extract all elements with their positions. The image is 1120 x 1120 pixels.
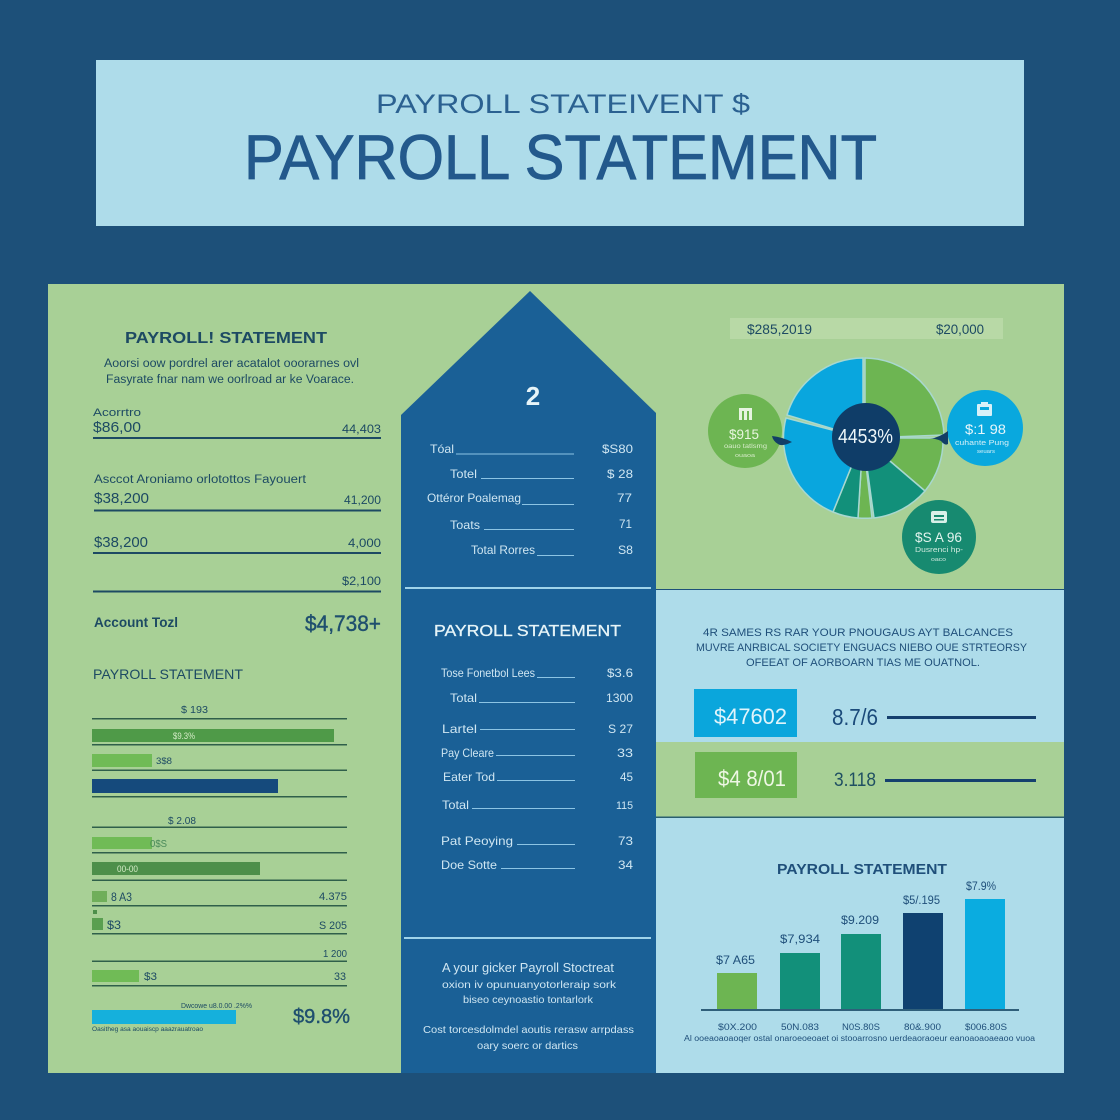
left intro text: Fasyrate fnar nam we oorlroad ar ke Voarace. (106, 374, 354, 386)
callout: green bubble: oauo tatlsmg (724, 444, 767, 450)
row: tax (441, 666, 633, 680)
bar chart heading: PAYROLL STATEMENT (777, 861, 947, 878)
metric row: blue (694, 689, 1036, 737)
panel: top right green (656, 284, 1064, 589)
pie centre value: 4453% (838, 426, 893, 448)
callout: teal bubble: oaco (931, 557, 946, 563)
left intro text (104, 358, 359, 386)
row: total hours (471, 543, 633, 557)
right intro text: 4R SAMES RS RAR YOUR PNOUGAUS AYT BALCANCES (703, 627, 1013, 639)
icon: card (931, 511, 947, 523)
progress bar with total: $9.8% (293, 1006, 350, 1028)
icon: people (739, 408, 752, 420)
account total (94, 611, 381, 636)
account row 1 (93, 407, 381, 439)
account row 2: Asccot Aroniamo orlotottos Fayouert (94, 474, 307, 486)
right intro text: OFEEAT OF AORBOARN TIAS ME OUATNOL. (746, 657, 980, 669)
bar list: second group: 00-00 (117, 864, 138, 874)
row: total 3: 1300 (606, 691, 633, 705)
account row 4: $2,100 (342, 574, 381, 588)
callout: blue bubble (930, 390, 1023, 466)
account total: $4,738+ (305, 611, 381, 636)
centre footer text: oary soerc or dartics (477, 1040, 578, 1052)
left subheading: PAYROLL STATEMENT (93, 666, 243, 682)
row: tools: Toats (450, 518, 480, 532)
bar chart: $9.209 (841, 913, 879, 927)
panel: account summary and bars (48, 284, 401, 1073)
pie chart (783, 358, 944, 518)
centre footer text: Cost torcesdolmdel aoutis rerasw arrpdass (423, 1024, 634, 1036)
row: due: Doe Sotte (441, 858, 497, 872)
panel: middle right blue (656, 590, 1064, 742)
progress bar with total: Dwcowe u8.0.00 .2%% (181, 1003, 252, 1010)
account row 3: 4,000 (348, 536, 381, 550)
panel: middle right green band (656, 742, 1064, 817)
bar chart: $7.9% (966, 879, 996, 893)
bar chart: $0X.200 (718, 1022, 757, 1033)
row: label (442, 722, 633, 736)
row: label: S 27 (608, 722, 633, 736)
row: tools: 71 (619, 517, 632, 531)
callout: blue bubble: cuhante Pung (955, 440, 1009, 447)
row: label: Lartel (442, 722, 477, 736)
title: PAYROLL STATEMENT (244, 123, 877, 193)
bar chart: N0S.80S (842, 1022, 880, 1033)
bar list: first group: $ 193 (181, 705, 208, 716)
callout: teal bubble: Dusrenci hp- (915, 547, 964, 554)
left heading: PAYROLL! STATEMENT (125, 330, 327, 347)
row: total 4: 115 (616, 800, 633, 812)
callout: teal bubble (902, 500, 976, 574)
account row 1: Acorrtro (93, 407, 141, 419)
row: pay cleared: Pay Cleare (441, 746, 494, 760)
row: paid (441, 834, 633, 848)
bar chart (684, 879, 1036, 1043)
bar list: second group: 8 A3 (111, 890, 132, 904)
row: total hours: Total Rorres (471, 543, 535, 557)
bar list: first group (92, 705, 347, 798)
centre footer text (423, 961, 634, 1052)
row: pay cleared (441, 746, 633, 760)
row: total 4: Total (442, 798, 469, 812)
callout: teal bubble: $S A 96 (915, 529, 962, 545)
panel: centre house column (401, 291, 656, 1073)
callout: blue bubble: seuars (977, 449, 995, 455)
callout: blue bubble: $:1 98 (965, 421, 1006, 437)
header banner (96, 60, 1024, 226)
bar chart: $7 A65 (716, 953, 755, 967)
row: tax: $3.6 (607, 666, 633, 680)
metric row: blue: 8.7/6 (832, 704, 878, 730)
row: total 3 (450, 691, 633, 705)
metric row: green: $4 8/01 (718, 766, 786, 791)
bar list: first group: $9.3% (173, 731, 195, 741)
account row 2 (94, 474, 381, 512)
row: eater: Eater Tod (443, 770, 495, 784)
arrow: right pointer (930, 431, 948, 445)
bar list: second group (92, 816, 347, 986)
row: pay cleared: 33 (617, 746, 633, 760)
arrow: left pointer (772, 436, 792, 445)
panel: bottom right blue (656, 818, 1064, 1073)
pie centre value (832, 403, 900, 471)
row: eater: 45 (620, 770, 633, 784)
bar list: second group: 0$S (150, 839, 167, 850)
step number: 2 (526, 381, 540, 411)
row: paid: Pat Peoying (441, 834, 513, 848)
callout: green bubble: $915 (729, 426, 759, 442)
bar list: second group: 1 200 (323, 948, 347, 960)
bar list: second group: 33 (334, 971, 346, 983)
account total: Account Tozl (94, 615, 178, 630)
bar list: second group: $ 2.08 (168, 816, 196, 827)
top value band (730, 318, 1003, 339)
row: paid: 73 (618, 834, 633, 848)
icon: briefcase (977, 402, 992, 416)
centre footer text: oxion iv opunuanyotorleraip sork (442, 979, 617, 991)
row: total (430, 442, 633, 456)
callout: green bubble (708, 394, 792, 468)
row: tax: Tose Fonetbol Lees (441, 666, 535, 680)
row: eater (443, 770, 633, 784)
bar list: second group: 4.375 (319, 891, 347, 903)
right intro text (696, 627, 1028, 669)
metric row: green (695, 752, 1036, 798)
row: total 4 (442, 798, 633, 812)
bar chart: Al ooeaoaoaoqer ostal onaroeoeoaet oi stooarrosno uerdeaoraoeur eanoaoaoaeaoo vuoa (684, 1034, 1036, 1043)
account row 3: $38,200 (94, 534, 148, 551)
metric row: blue: $47602 (714, 704, 787, 729)
account row 2: 41,200 (344, 493, 381, 507)
bar chart: $006.80S (965, 1022, 1007, 1033)
right intro text: MUVRE ANRBICAL SOCIETY ENGUACS NIEBO OUE STRTEORSY (696, 642, 1028, 654)
account row 1: $86,00 (93, 419, 141, 436)
row: total 2: Totel (450, 467, 477, 481)
bar list: second group: $3 (107, 918, 121, 932)
row: total 3: Total (450, 691, 477, 705)
centre heading: PAYROLL STATEMENT (434, 623, 621, 640)
top value band: $20,000 (936, 321, 984, 337)
bar list: second group: S 205 (319, 920, 347, 932)
bar chart: $5/.195 (903, 893, 940, 907)
top value band: $285,2019 (747, 321, 812, 337)
row: total 2 (450, 467, 633, 481)
bar chart: 80&.900 (904, 1022, 941, 1033)
account row 3 (93, 534, 381, 554)
row: total 2: $ 28 (607, 467, 633, 481)
row: other: Ottéror Poalemag (427, 491, 521, 505)
callout: green bubble: ouaoa (735, 453, 756, 459)
bar list: first group: 3$8 (156, 756, 172, 767)
row: other (427, 491, 632, 505)
bar chart: $7,934 (780, 932, 820, 946)
centre footer text: biseo ceynoastio tontarlork (463, 994, 594, 1006)
row: total: Tóal (430, 442, 454, 456)
row: total: $S80 (602, 442, 633, 456)
centre footer text: A your gicker Payroll Stoctreat (442, 961, 615, 975)
account row 2: $38,200 (94, 490, 149, 507)
account row 1: 44,403 (342, 422, 381, 436)
row: due: 34 (618, 858, 633, 872)
subtitle: PAYROLL STATEIVENT $ (376, 89, 750, 119)
progress bar with total (92, 1003, 350, 1033)
bar list: second group: $3 (144, 971, 157, 983)
progress bar with total: Oasitheg asa aouaiscp aaazrauatroao (92, 1026, 203, 1033)
row: total hours: S8 (618, 543, 633, 557)
left intro text: Aoorsi oow pordrel arer acatalot ooorarnes ovl (104, 358, 359, 370)
bar chart: 50N.083 (781, 1022, 819, 1033)
row: other: 77 (617, 491, 632, 505)
row: due (441, 858, 633, 872)
row: tools (450, 517, 632, 532)
panel: green backdrop behind roof (400, 284, 657, 424)
metric row: green: 3.118 (834, 770, 876, 791)
